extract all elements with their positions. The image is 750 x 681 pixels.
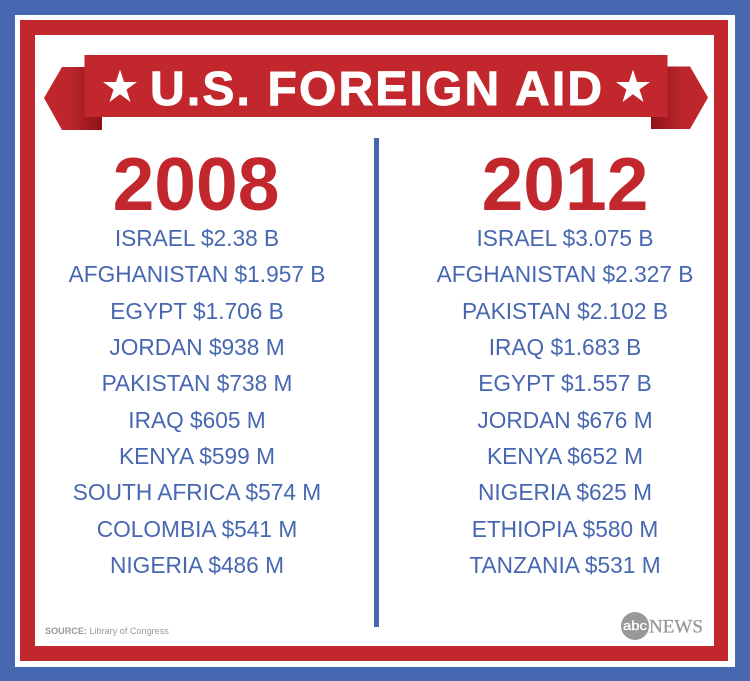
- list: 2012: JORDAN $676 M: [477, 407, 653, 433]
- source note: SOURCE: Library of Congress: [45, 626, 169, 636]
- list: 2012: NIGERIA $625 M: [478, 479, 652, 505]
- list: 2008: [68, 225, 325, 578]
- list: 2008: JORDAN $938 M: [109, 334, 285, 360]
- list: 2012: TANZANIA $531 M: [469, 552, 661, 578]
- list: 2008: ISRAEL $2.38 B: [115, 225, 279, 251]
- list: 2012: ISRAEL $3.075 B: [476, 225, 654, 251]
- list: 2008: SOUTH AFRICA $574 M: [73, 479, 321, 505]
- list: 2008: KENYA $599 M: [119, 443, 275, 469]
- title banner: U.S. FOREIGN AID: [150, 63, 602, 116]
- list: 2012: AFGHANISTAN $2.327 B: [437, 261, 693, 287]
- title banner: [44, 55, 708, 130]
- list: 2012: PAKISTAN $2.102 B: [462, 298, 668, 324]
- list: 2008: EGYPT $1.706 B: [110, 298, 284, 324]
- list: 2012: [436, 225, 693, 578]
- center divider: [374, 138, 379, 627]
- year 2012: 2012: [482, 142, 648, 226]
- abc news logo: [621, 612, 703, 640]
- list: 2012: IRAQ $1.683 B: [489, 334, 641, 360]
- list: 2012: KENYA $652 M: [487, 443, 643, 469]
- list: 2008: PAKISTAN $738 M: [102, 370, 292, 396]
- list: 2012: ETHIOPIA $580 M: [472, 516, 658, 542]
- year 2008: 2008: [113, 142, 279, 226]
- abc news logo: NEWS: [649, 618, 703, 638]
- list: 2008: IRAQ $605 M: [128, 407, 266, 433]
- list: 2008: COLOMBIA $541 M: [97, 516, 297, 542]
- list: 2008: AFGHANISTAN $1.957 B: [69, 261, 325, 287]
- list: 2012: EGYPT $1.557 B: [478, 370, 652, 396]
- abc news logo: abc: [623, 618, 648, 633]
- list: 2008: NIGERIA $486 M: [110, 552, 284, 578]
